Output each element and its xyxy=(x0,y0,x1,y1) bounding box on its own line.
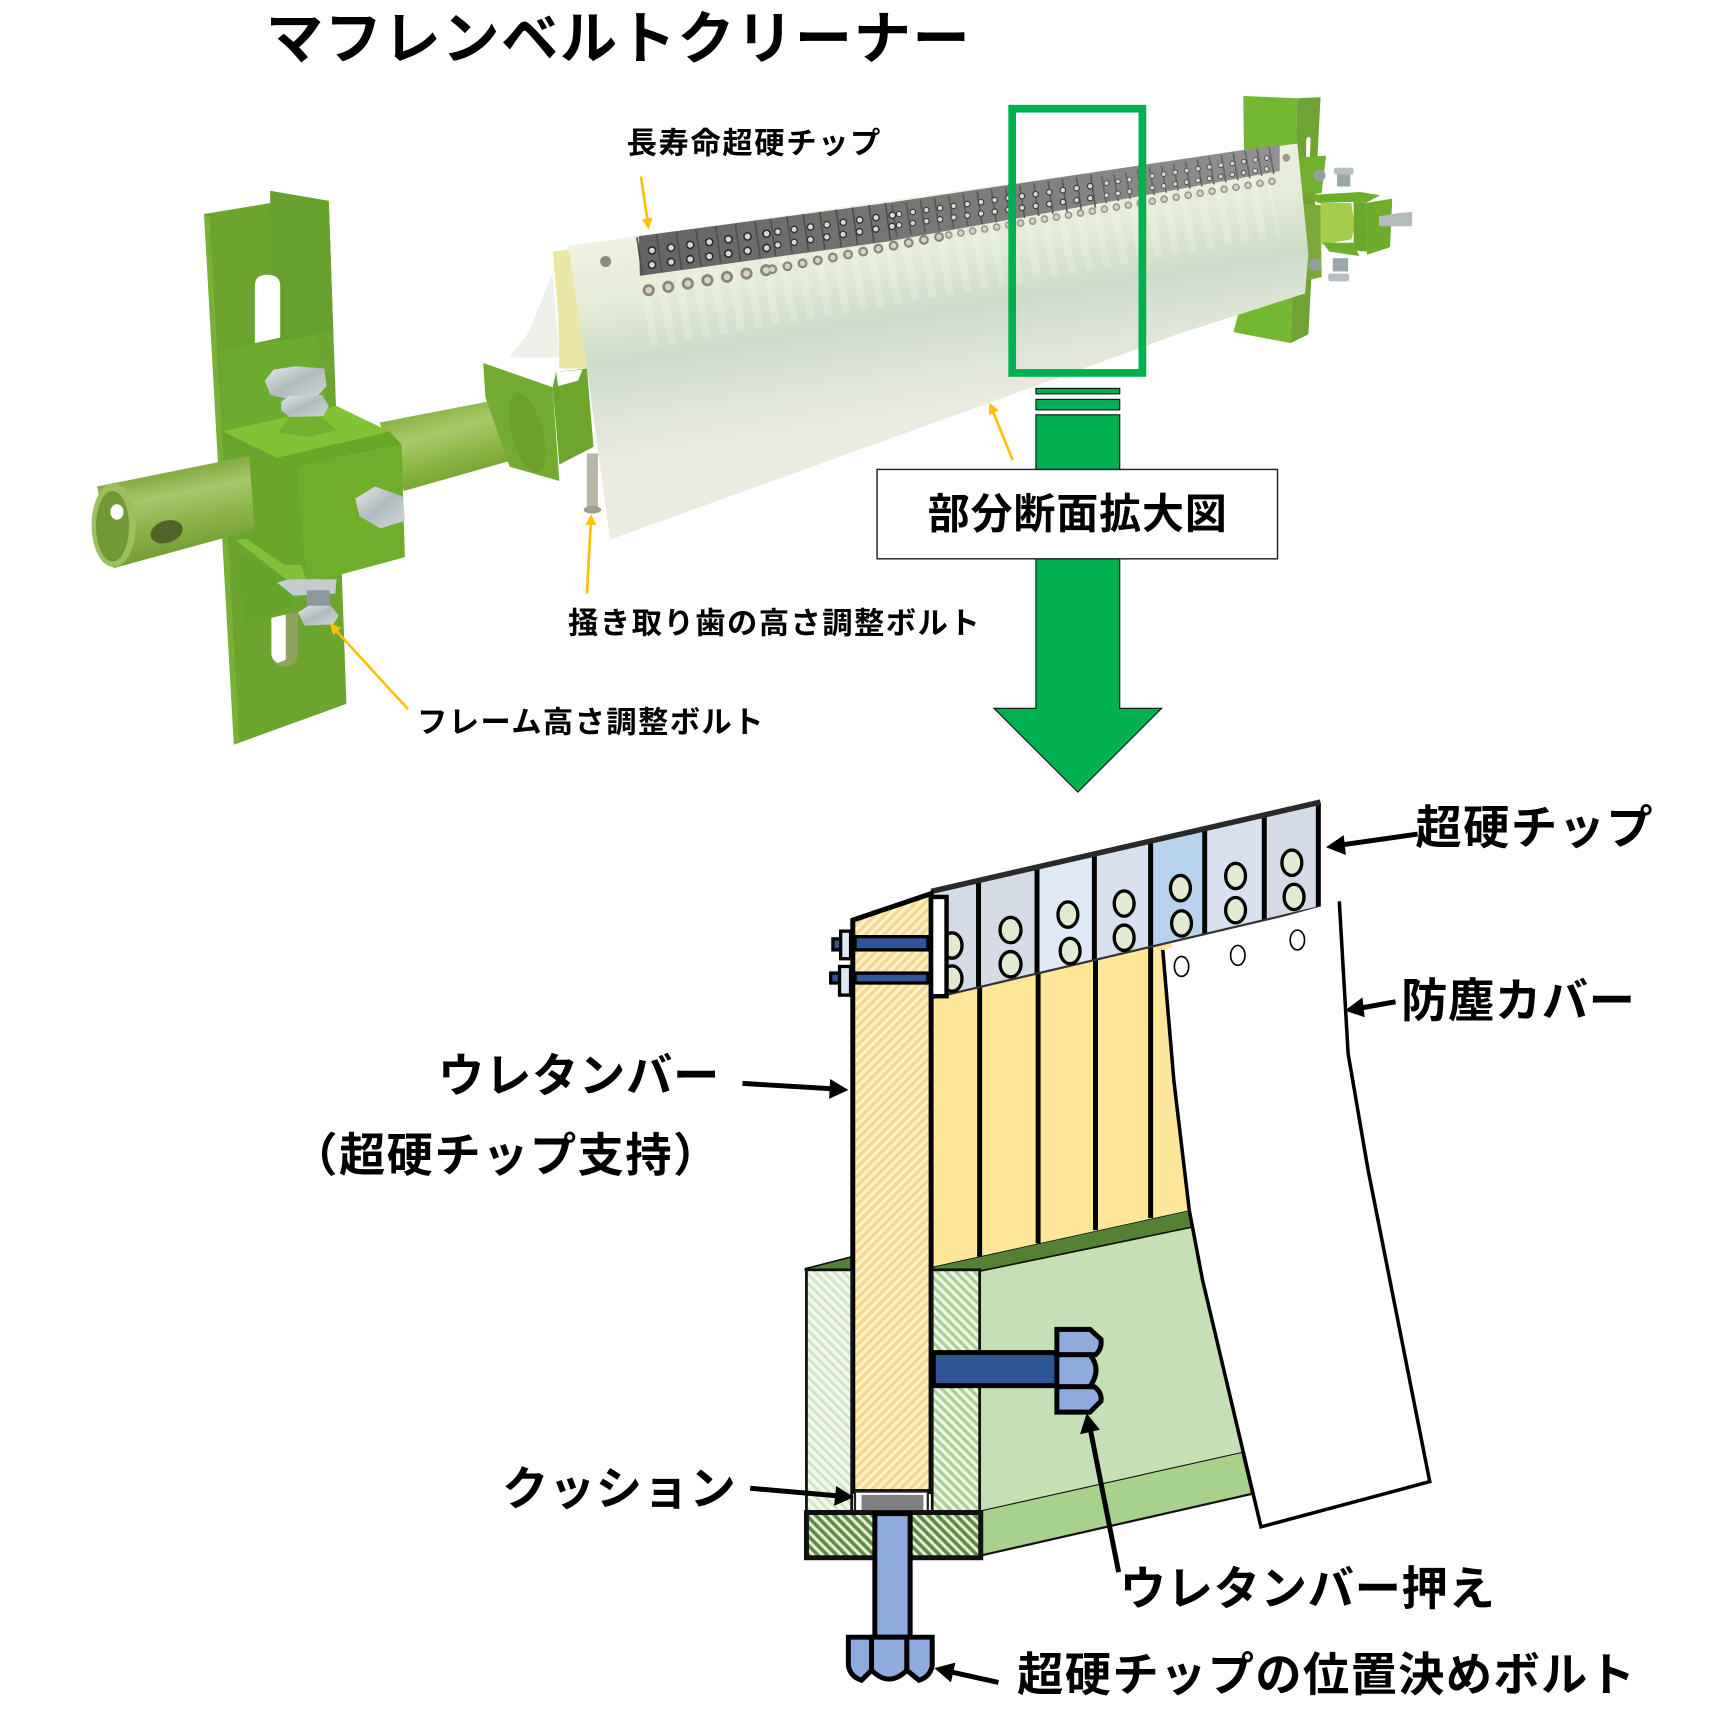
arrow: scraper height adjusting bolt xyxy=(585,514,596,594)
chip fastening bolts xyxy=(831,931,928,995)
long-life carbide chips xyxy=(639,145,1280,276)
label: frame height adjusting bolt: フレーム高さ調整ボルト xyxy=(417,706,763,740)
green holder face xyxy=(981,1227,1242,1510)
arrow: carbide chip xyxy=(1326,834,1418,855)
lower green band xyxy=(981,1452,1252,1556)
left mounting bracket xyxy=(204,191,346,745)
dust cover xyxy=(1163,901,1430,1527)
section diagram xyxy=(805,802,1430,1680)
arrow: long-life carbide chip xyxy=(641,177,653,230)
arrow: urethane bar retainer xyxy=(1080,1413,1119,1572)
steel bolts xyxy=(265,366,405,626)
green selection rectangle xyxy=(1012,109,1142,373)
arrow: cover to zoom box xyxy=(989,403,1013,460)
title: マフレンベルトクリーナー xyxy=(266,8,970,72)
clamp box xyxy=(223,406,405,588)
urethane bar xyxy=(853,894,931,1492)
label: carbide chip positioning bolt: 超硬チップの位置決めボルト xyxy=(1017,1649,1635,1701)
arrow: cushion xyxy=(750,1486,854,1506)
urethane bar retainer bolt xyxy=(933,1329,1101,1412)
yellow urethane teeth xyxy=(933,941,1189,1267)
right retainer block xyxy=(932,1270,980,1511)
rivet row xyxy=(600,154,1290,290)
carbide chips xyxy=(931,802,1321,998)
chip positioning bolt xyxy=(848,1514,932,1680)
label box: partial section enlarged view xyxy=(877,469,1278,559)
tube and flange xyxy=(92,363,594,568)
label: carbide chip support: （超硬チップ支持） xyxy=(291,1130,719,1182)
label: dust cover: 防塵カバー xyxy=(1401,975,1635,1027)
label: long-life carbide chip: 長寿命超硬チップ xyxy=(627,126,880,160)
cushion xyxy=(855,1492,928,1513)
white clamp plate xyxy=(931,897,947,996)
green base plate xyxy=(806,1513,981,1558)
arrow: positioning bolt xyxy=(934,1663,998,1682)
cover holes xyxy=(1174,930,1305,976)
back of cover sheet xyxy=(510,273,559,357)
protective cover sheet xyxy=(568,143,1308,540)
label: cushion: クッション xyxy=(502,1463,736,1515)
arrow: dust cover xyxy=(1345,997,1396,1017)
label: urethane bar retainer: ウレタンバー押え xyxy=(1120,1563,1495,1615)
chip mounting holes xyxy=(942,850,1304,991)
right mounting bracket xyxy=(1233,96,1412,343)
cover slit stripes xyxy=(645,204,1274,314)
left retainer block xyxy=(806,1270,852,1511)
scraper height bolt xyxy=(584,453,601,514)
dark green top band xyxy=(805,1210,1194,1271)
big green downward arrow xyxy=(994,388,1162,792)
label: scraper height adjusting bolt: 掻き取り歯の高さ調整ボルト xyxy=(568,606,980,640)
product photo: belt cleaner xyxy=(92,96,1412,745)
arrow: urethane bar xyxy=(742,1079,848,1099)
arrow: frame height adjusting bolt xyxy=(330,623,408,709)
label: urethane bar: ウレタンバー xyxy=(438,1050,719,1102)
label: carbide chip: 超硬チップ xyxy=(1415,802,1653,854)
chip studs xyxy=(652,157,1275,265)
label box: partial section enlarged view: 部分断面拡大図 xyxy=(928,490,1227,537)
urethane strip edge xyxy=(553,248,588,369)
